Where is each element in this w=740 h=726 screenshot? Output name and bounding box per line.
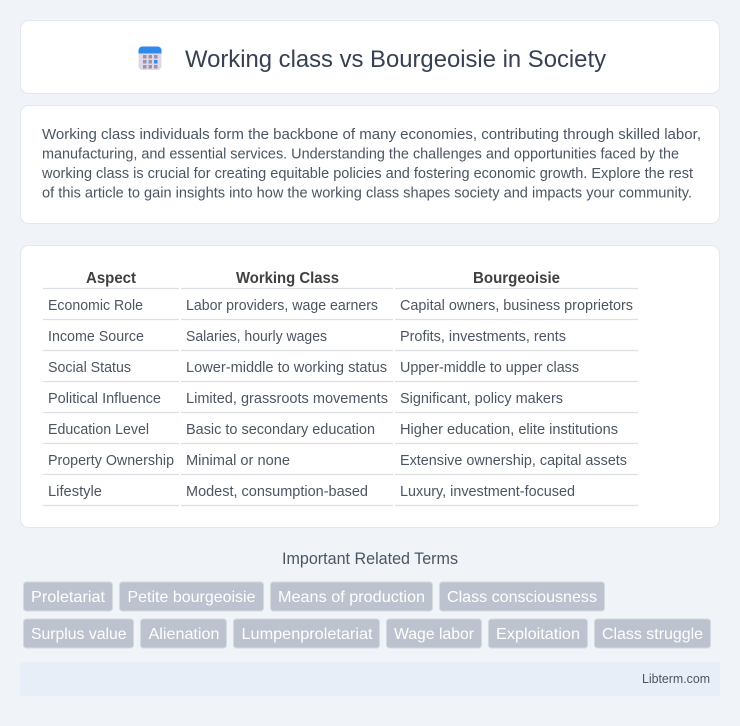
table row: income source: Profits, investments, rents — [400, 329, 566, 345]
tag: class consciousness: Class consciousness — [447, 589, 597, 606]
tag: exploitation: Exploitation — [496, 626, 580, 643]
table row: economic role — [48, 298, 633, 314]
table row: property ownership: Extensive ownership, capital assets — [400, 453, 627, 469]
tag: exploitation — [488, 619, 588, 648]
table row: property ownership: Property Ownership — [48, 453, 174, 469]
tag: lumpenproletariat — [234, 619, 380, 648]
tag: means of production — [270, 582, 432, 611]
panel: introduction: of this article to gain insights into how the working class shapes society and impacts your community. — [42, 186, 692, 202]
table header: Aspect — [86, 270, 137, 287]
table row: economic role: Labor providers, wage earners — [186, 298, 378, 314]
table row: lifestyle: Luxury, investment-focused — [400, 484, 575, 500]
title: Working class vs Bourgeoisie in Society — [185, 46, 607, 73]
footer bar — [20, 662, 720, 696]
table header — [86, 270, 560, 287]
table row: social status: Lower-middle to working status — [186, 360, 387, 376]
heading: related terms: Important Related Terms — [282, 550, 458, 568]
table row: education level: Education Level — [48, 422, 149, 438]
panel: introduction: working class is crucial for creating equitable policies and fostering economic growth. Explore the rest — [41, 166, 693, 182]
tag: surplus value: Surplus value — [31, 626, 127, 643]
tag: wage labor: Wage labor — [394, 626, 475, 643]
tag: class struggle — [594, 619, 710, 648]
table row: education level: Basic to secondary education — [186, 422, 375, 438]
tag: class consciousness — [440, 582, 604, 611]
table row: political influence — [48, 391, 563, 407]
table row: education level — [48, 422, 618, 438]
icon: calendar — [138, 46, 162, 70]
tag: means of production: Means of production — [278, 589, 425, 606]
table row: social status: Upper-middle to upper class — [400, 360, 579, 376]
tag: petite bourgeoisie — [120, 582, 264, 611]
table row: political influence: Significant, policy makers — [400, 391, 563, 407]
table row: lifestyle: Modest, consumption-based — [186, 484, 368, 500]
table row: social status: Social Status — [48, 360, 131, 376]
tag: petite bourgeoisie: Petite bourgeoisie — [128, 589, 256, 606]
tag: class struggle: Class struggle — [602, 626, 703, 643]
table row: economic role: Economic Role — [48, 298, 143, 314]
table row: lifestyle: Lifestyle — [48, 484, 102, 500]
panel: introduction: manufacturing, and essential services. Understanding the challenges and opportunities faced by the — [42, 146, 679, 162]
table row: education level: Higher education, elite institutions — [400, 422, 618, 438]
table row: income source: Income Source — [48, 329, 144, 345]
table row: income source: Salaries, hourly wages — [186, 329, 327, 345]
panel: comparison table — [20, 246, 720, 528]
table row: property ownership — [48, 453, 627, 469]
tag group: related terms — [24, 582, 710, 648]
footer text: Libterm.com — [642, 672, 710, 686]
table row: political influence: Political Influence — [48, 391, 161, 407]
tag: surplus value — [24, 619, 134, 648]
tag: alienation: Alienation — [148, 626, 220, 643]
panel: introduction: Working class individuals form the backbone of many economies, contributing through skilled labor, — [42, 127, 701, 143]
panel: introduction — [20, 106, 720, 224]
table header: Bourgeoisie — [473, 270, 560, 287]
table row: property ownership: Minimal or none — [186, 453, 290, 469]
tag: alienation — [140, 619, 226, 648]
table row: social status — [48, 360, 579, 376]
table row: economic role: Capital owners, business proprietors — [400, 298, 633, 314]
tag: proletariat — [24, 582, 112, 611]
tag: lumpenproletariat: Lumpenproletariat — [242, 626, 373, 643]
table row: income source — [48, 329, 566, 345]
table header: Working Class — [236, 270, 339, 287]
table row: political influence: Limited, grassroots movements — [186, 391, 388, 407]
tag: proletariat: Proletariat — [31, 589, 106, 606]
table row: lifestyle — [48, 484, 575, 500]
header panel — [20, 20, 720, 94]
table rules — [43, 288, 638, 506]
tag: wage labor — [386, 619, 482, 648]
